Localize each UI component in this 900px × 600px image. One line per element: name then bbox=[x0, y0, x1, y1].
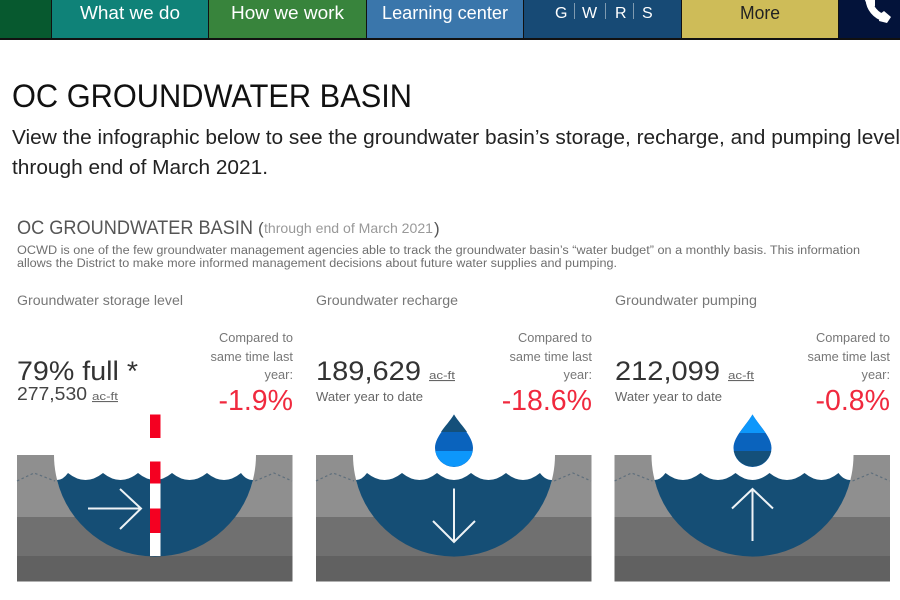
nav: home tab bbox=[0, 0, 51, 38]
storage figure: 79% full * bbox=[17, 356, 139, 386]
pumping figure: ac-ft bbox=[728, 370, 754, 382]
infographic heading: ) bbox=[434, 219, 440, 238]
nav: GWRS: R bbox=[615, 5, 627, 22]
intro text: through end of March 2021. bbox=[12, 157, 268, 179]
infographic description: OCWD is one of the few groundwater management agencies able to track the groundwater basin’s “water budget” on a monthly basis. This information bbox=[17, 245, 860, 257]
recharge figure: ac-ft bbox=[429, 370, 455, 382]
storage figure bbox=[17, 356, 139, 404]
nav: how we work: How we work bbox=[231, 3, 345, 23]
comparison: same time last bbox=[510, 349, 592, 364]
nav: what we do bbox=[52, 0, 208, 38]
nav: more: More bbox=[740, 3, 780, 23]
infographic heading: OC GROUNDWATER BASIN bbox=[17, 218, 253, 239]
intro text: View the infographic below to see the groundwater basin’s storage, recharge, and pumping level bbox=[12, 127, 900, 149]
gauge bbox=[150, 414, 160, 556]
infographic bbox=[17, 218, 890, 582]
infographic heading: ( bbox=[258, 219, 264, 238]
basin diagram bbox=[316, 414, 592, 582]
nav: more bbox=[682, 0, 838, 38]
panel heading: Groundwater recharge bbox=[316, 293, 458, 308]
intro text bbox=[12, 127, 900, 179]
infographic description: allows the District to make more informed management decisions about future water supplies and pumping. bbox=[17, 258, 617, 270]
infographic heading bbox=[17, 218, 440, 239]
recharge figure bbox=[316, 356, 455, 404]
basin diagram bbox=[17, 414, 292, 582]
comparison: -0.8% bbox=[816, 385, 890, 417]
panel: groundwater pumping bbox=[614, 293, 890, 582]
arrow: down bbox=[433, 488, 475, 542]
comparison bbox=[210, 330, 293, 417]
panel heading: Groundwater pumping bbox=[615, 293, 757, 308]
recharge figure: Water year to date bbox=[316, 390, 423, 404]
nav: GWRS: W bbox=[582, 5, 598, 22]
comparison: -18.6% bbox=[502, 385, 592, 417]
arrow: right bbox=[88, 489, 141, 529]
page title: OC GROUNDWATER BASIN bbox=[12, 78, 412, 114]
nav: GWRS: S bbox=[642, 5, 653, 22]
panel heading: Groundwater storage level bbox=[17, 293, 183, 308]
comparison: Compared to bbox=[816, 330, 890, 345]
nav: phone bbox=[839, 0, 900, 38]
nav: GWRS bbox=[524, 0, 681, 38]
comparison: Compared to bbox=[518, 330, 592, 345]
comparison: year: bbox=[862, 367, 890, 382]
arrow: up bbox=[732, 489, 773, 541]
pumping figure bbox=[615, 356, 754, 404]
storage figure: ac-ft bbox=[92, 391, 118, 403]
comparison bbox=[808, 330, 890, 417]
comparison bbox=[502, 330, 592, 417]
nav: how we work bbox=[209, 0, 366, 38]
infographic description bbox=[17, 245, 860, 270]
nav: learning center bbox=[367, 0, 523, 38]
comparison: same time last bbox=[808, 349, 890, 364]
nav: what we do: What we do bbox=[80, 3, 180, 23]
navigation bar bbox=[0, 0, 900, 40]
comparison: -1.9% bbox=[219, 385, 293, 417]
recharge figure: 189,629 bbox=[316, 356, 421, 386]
pumping figure: Water year to date bbox=[615, 390, 722, 404]
infographic heading: through end of March 2021 bbox=[264, 220, 433, 236]
basin diagram bbox=[614, 414, 890, 582]
pumping figure: 212,099 bbox=[615, 356, 720, 386]
icon: water drop bbox=[734, 414, 772, 467]
panel: groundwater recharge bbox=[316, 293, 592, 582]
comparison: year: bbox=[265, 367, 293, 382]
nav: learning center: Learning center bbox=[382, 3, 508, 23]
comparison: same time last bbox=[210, 349, 293, 364]
nav: GWRS: G bbox=[555, 5, 567, 22]
storage figure: 277,530 bbox=[17, 384, 87, 404]
comparison: Compared to bbox=[219, 330, 293, 345]
comparison: year: bbox=[564, 367, 592, 382]
panel: groundwater storage level bbox=[17, 293, 293, 582]
icon: water drop bbox=[435, 414, 473, 467]
